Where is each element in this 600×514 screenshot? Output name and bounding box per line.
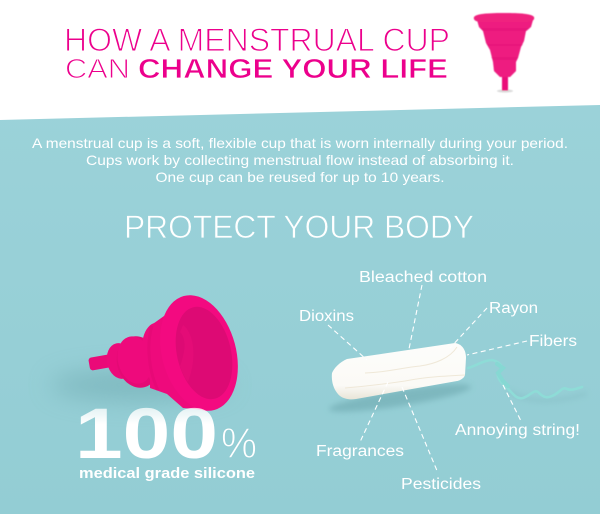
100% statistic: medical grade silicone: [79, 465, 255, 482]
callout labels: Fibers: [529, 333, 577, 350]
callout labels: [299, 269, 580, 493]
intro text: [32, 135, 568, 185]
title: CAN: [65, 53, 130, 84]
pink silicone cup: [50, 286, 250, 420]
callout labels: Rayon: [489, 300, 538, 317]
icon: small menstrual cup: [474, 13, 534, 93]
100% statistic: %: [221, 420, 257, 468]
callout lines: [328, 285, 527, 473]
intro text: A menstrual cup is a soft, flexible cup that is worn internally during your period.: [32, 135, 568, 151]
title: CHANGE YOUR LIFE: [138, 53, 448, 84]
heading: protect your body: PROTECT YOUR BODY: [124, 209, 474, 245]
100% statistic: 100: [75, 395, 218, 474]
callout labels: Pesticides: [401, 476, 481, 493]
callout labels: Bleached cotton: [359, 269, 487, 286]
title: HOW A MENSTRUAL CUP: [64, 22, 450, 58]
intro text: Cups work by collecting menstrual flow instead of absorbing it.: [86, 152, 514, 168]
tampon: [328, 343, 472, 417]
teal background panel: [0, 105, 600, 514]
callout labels: Annoying string!: [455, 422, 580, 439]
tampon string: [468, 360, 585, 400]
callout labels: Fragrances: [316, 443, 404, 460]
intro text: One cup can be reused for up to 10 years.: [156, 169, 444, 185]
title: [64, 22, 450, 84]
callout labels: Dioxins: [299, 308, 354, 325]
100% statistic: [75, 395, 257, 482]
